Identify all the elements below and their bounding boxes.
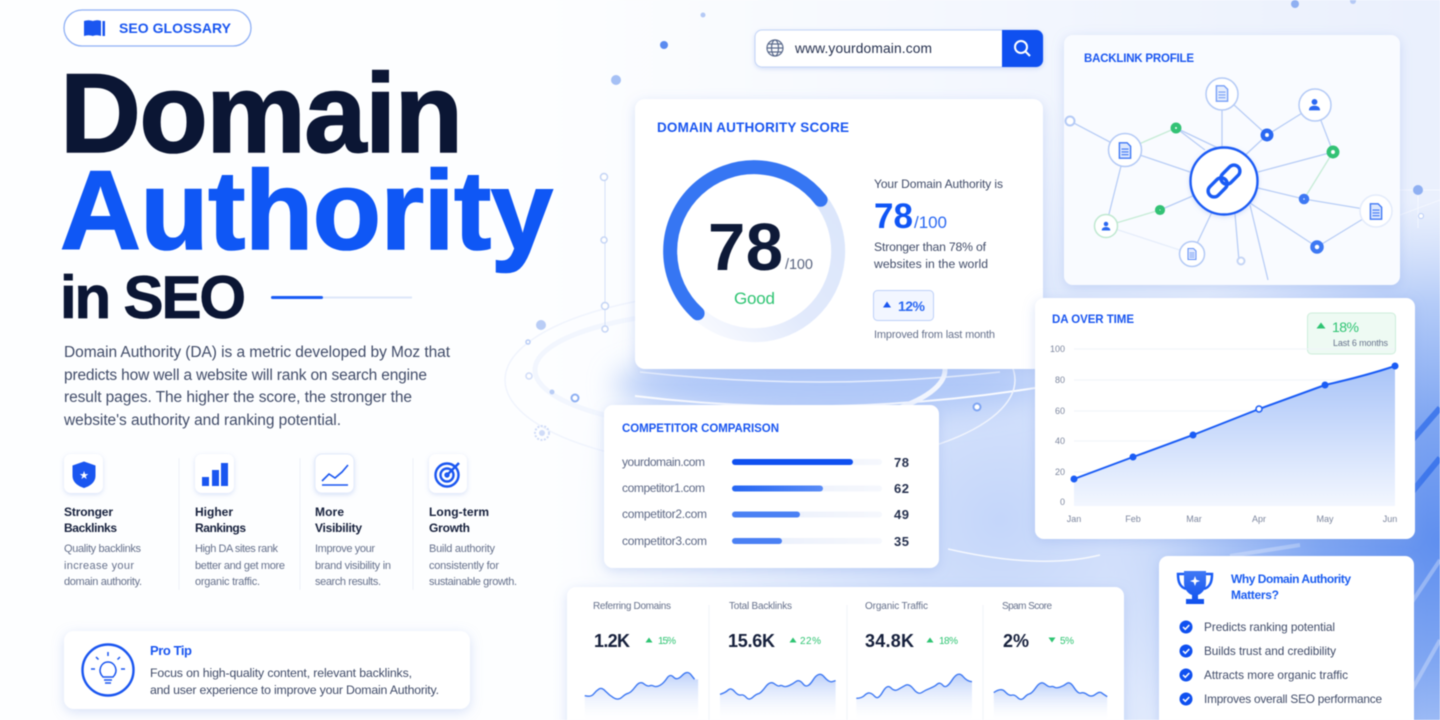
checklist: Improves overall SEO performance [1204,692,1382,706]
panel: competitor comparison: COMPETITOR COMPARISON [622,423,779,435]
icon: shield [72,462,96,488]
icon: light bulb [82,644,134,696]
panel: domain authority score: websites in the world [873,257,988,271]
feature: more visibility: More [315,505,344,519]
row: competitor2.com [622,507,909,522]
feature: long-term growth: Long-term [429,505,489,519]
line chart: 20 [1055,467,1065,477]
callout: pro tip: Focus on high-quality content, relevant backlinks, [150,666,412,680]
checklist: Predicts ranking potential [1204,620,1335,634]
feature: long-term growth: Growth [429,521,470,535]
line chart: Feb [1125,514,1141,524]
feature: higher rankings [195,454,285,588]
row: competitor3.com: competitor3.com [622,534,707,548]
row: yourdomain.com: 78 [894,455,909,470]
line chart [1050,344,1398,524]
feature: stronger backlinks: Quality backlinks [64,543,142,555]
icon: trophy [1178,571,1212,604]
panel: domain authority score: /100 [785,257,813,273]
feature: long-term growth: sustainable growth. [429,576,517,588]
icon: target [436,463,459,486]
panel: metrics [567,587,1124,720]
row: yourdomain.com [622,455,909,470]
metric: spam score: 5% [1060,636,1074,647]
feature: long-term growth: Build authority [429,543,496,555]
panel: domain authority score: Good [734,289,775,308]
search bar: www.yourdomain.com [794,41,932,56]
trend callout [1308,313,1396,354]
panel: DA over time: DA OVER TIME [1052,314,1134,326]
panel: domain authority score: Improved from last month [874,329,995,341]
checklist [1180,620,1382,706]
metric: spam score: Spam Score [1002,601,1052,612]
panel: domain authority score: Your Domain Authority is [874,177,1003,191]
panel: backlink profile: BACKLINK PROFILE [1084,53,1194,65]
callout: pro tip: Pro Tip [150,643,192,658]
title: in SEO [60,264,246,331]
feature: more visibility: search results. [315,576,381,588]
network nodes [1066,78,1392,266]
feature: stronger backlinks: ★ [79,470,89,482]
metric: organic traffic [856,601,972,720]
feature: stronger backlinks: Stronger [64,505,113,519]
feature: stronger backlinks: domain authority. [64,576,142,588]
network center [1190,148,1258,214]
row: yourdomain.com: yourdomain.com [622,455,705,469]
row: competitor1.com [622,481,909,496]
metric: spam score [994,601,1107,720]
feature: higher rankings: organic traffic. [195,576,260,588]
title: Authority [60,148,553,273]
intro paragraph: predicts how well a website will rank on search engine [64,367,427,384]
trend badge [874,290,934,320]
row: competitor2.com: 49 [894,507,909,522]
callout: pro tip [64,631,470,709]
metric: total backlinks: 15.6K [728,631,775,651]
line chart: May [1316,514,1334,524]
panel: domain authority score: DOMAIN AUTHORITY SCORE [657,120,849,135]
metric: organic traffic: 18% [939,636,958,647]
panel: why domain authority matters: Why Domain Authority [1231,572,1351,586]
row: competitor3.com: 35 [894,534,909,549]
panel: backlink profile [1064,35,1400,285]
intro paragraph: website's authority and ranking potential. [63,412,341,429]
search bar [755,30,1043,67]
icon: magnifier [1015,41,1030,56]
line chart: 100 [1050,344,1065,354]
feature: higher rankings: Higher [195,505,233,519]
metric: referring domains [585,601,698,720]
intro paragraph: Domain Authority (DA) is a metric developed by Moz that [64,344,451,361]
feature: stronger backlinks [64,454,142,588]
feature: higher rankings: Rankings [195,521,246,535]
panel: competitor comparison [604,405,939,568]
gauge [670,167,838,335]
feature: more visibility: Visibility [315,521,362,535]
panel: domain authority score: 78 [874,197,913,236]
panel: domain authority score [635,99,1043,369]
line chart: Mar [1186,514,1202,524]
feature: higher rankings: better and get more [195,560,285,572]
feature: higher rankings: High DA sites rank [195,543,278,555]
feature: long-term growth [429,454,517,588]
trend badge: 12% [898,298,926,314]
icon: bars [202,463,228,486]
line chart: Jan [1067,514,1081,524]
metric: referring domains: Referring Domains [593,601,671,612]
panel: why domain authority matters: Matters? [1231,588,1279,602]
feature: more visibility [315,454,391,588]
feature: stronger backlinks: Backlinks [64,521,117,535]
checklist: Attracts more organic traffic [1204,668,1348,682]
panel: domain authority score: 78 [708,210,783,285]
intro paragraph: result pages. The higher the score, the stronger the [64,389,412,406]
badge: SEO glossary: SEO GLOSSARY [119,20,232,36]
row: competitor2.com: competitor2.com [622,507,707,521]
metric: total backlinks [720,601,836,720]
row: competitor1.com: 62 [894,481,909,496]
title: Domain [60,51,463,176]
line chart: 40 [1055,436,1065,446]
title [60,51,553,331]
intro paragraph [63,344,451,429]
network lines [1070,94,1376,280]
feature: more visibility: Improve your [315,543,375,555]
metric: spam score: 2% [1003,631,1029,651]
icon: open book [84,20,105,36]
checklist: Builds trust and credibility [1204,644,1336,658]
row: competitor3.com [622,534,909,549]
panel: domain authority score: /100 [914,213,947,232]
badge: SEO glossary [64,10,251,46]
line chart: 80 [1055,375,1065,385]
feature: long-term growth: consistently for [429,560,499,572]
feature: stronger backlinks: increase your [64,560,134,572]
panel: domain authority score: Stronger than 78% of [874,240,987,254]
metric: organic traffic: 34.8K [865,631,914,651]
metric: referring domains: 15% [658,636,676,647]
panel: DA over time [1035,298,1415,539]
callout: pro tip: and user experience to improve your Domain Authority. [150,683,439,697]
line chart: Jun [1383,514,1397,524]
metric: organic traffic: Organic Traffic [865,601,928,612]
line chart: 60 [1055,406,1065,416]
trend callout: 18% [1332,319,1359,335]
metric: referring domains: 1.2K [594,631,630,651]
row: competitor1.com: competitor1.com [622,481,705,495]
trend callout: Last 6 months [1333,338,1388,348]
icon: globe [767,40,783,56]
line chart: Apr [1252,514,1266,524]
metric: total backlinks: Total Backlinks [729,601,792,612]
feature: more visibility: brand visibility in [315,560,391,572]
icon: line chart [322,465,348,485]
metric: total backlinks: 22% [800,636,821,647]
line chart: 0 [1060,497,1065,507]
panel: why domain authority matters [1159,556,1414,720]
